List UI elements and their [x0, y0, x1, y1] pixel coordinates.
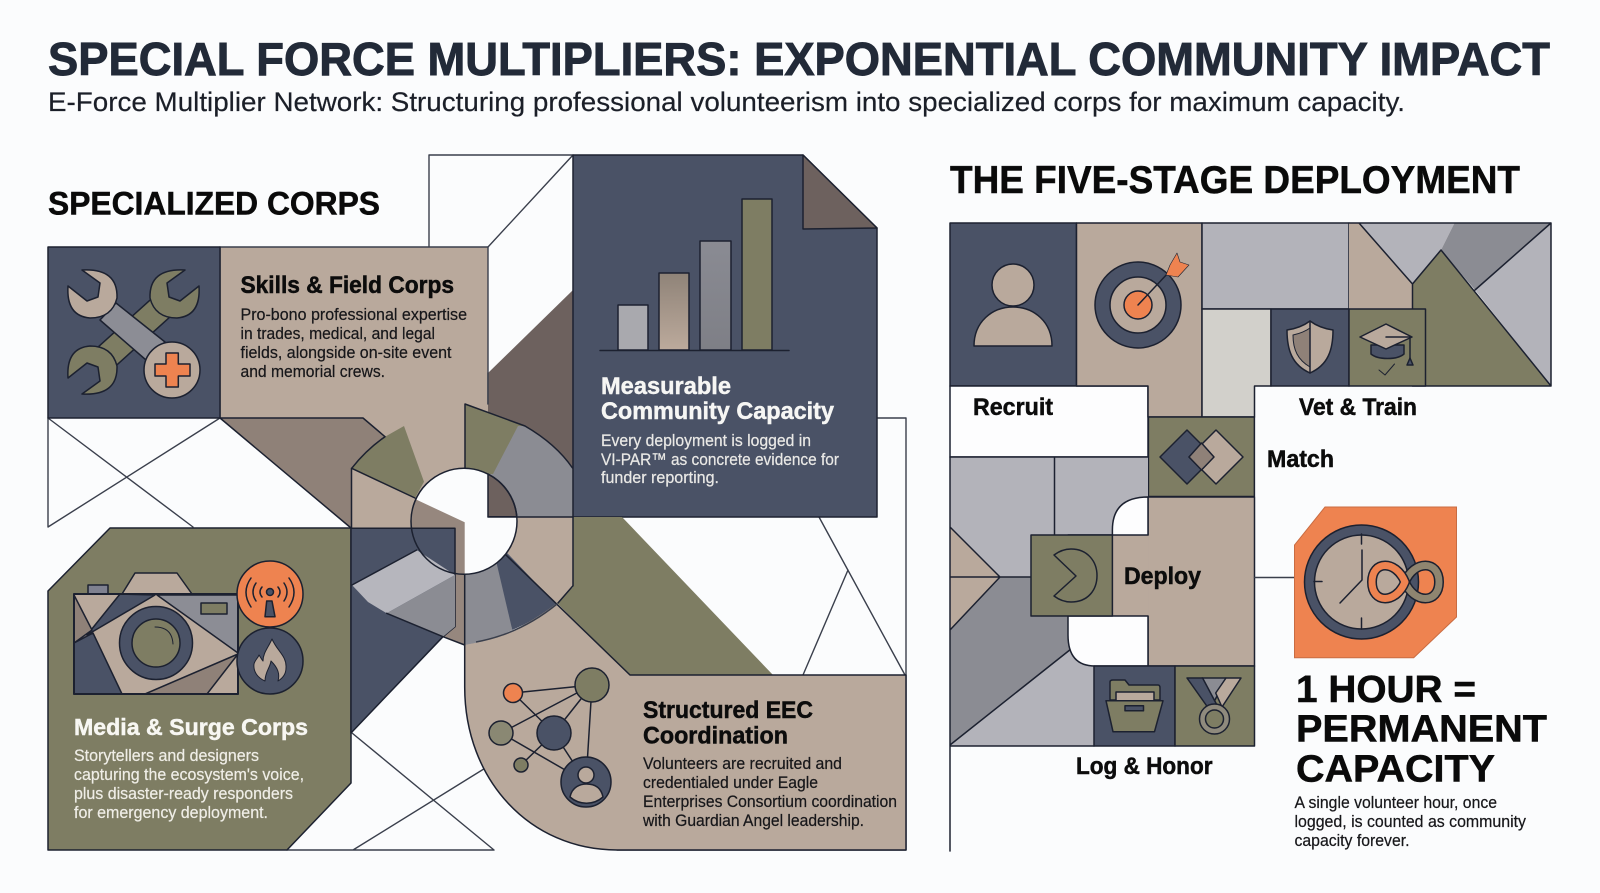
media description: [74, 746, 304, 822]
mosaic lower-left tiles: [950, 457, 1148, 851]
icon: medal: [1187, 678, 1241, 734]
navy pinwheel blade: [351, 528, 455, 733]
olive diagonal band: [557, 517, 773, 675]
mosaic tiles: [1202, 223, 1551, 417]
central white hub: [411, 468, 517, 645]
folded corner: [803, 155, 877, 229]
media heading: Media & Surge Corps: [74, 714, 308, 740]
EEC description: Enterprises Consortium coordination: [643, 792, 897, 811]
connector: deploy to clock: [1254, 576, 1295, 578]
skills description: Pro-bono professional expertise: [240, 305, 467, 324]
skills heading: Skills & Field Corps: [240, 272, 454, 299]
callout description: capacity forever.: [1294, 832, 1410, 850]
callout description: A single volunteer hour, once: [1294, 794, 1497, 812]
subtitle: E-Force Multiplier Network: Structuring professional volunteerism into specialized corps for maximum capacity.: [48, 87, 1405, 117]
panel: structured EEC coordination: [465, 555, 906, 850]
match label: Match: [1267, 446, 1334, 473]
media description: for emergency deployment.: [74, 803, 268, 822]
skills description: [240, 305, 467, 381]
media description: Storytellers and designers: [74, 746, 259, 765]
icon: target and arrow: [1095, 253, 1189, 348]
lower grey fan: [465, 540, 512, 645]
stage: log and honor: [1076, 666, 1254, 780]
measurable heading: [601, 373, 835, 425]
icon: clock with infinity: [1304, 525, 1439, 639]
vet and train label: Vet & Train: [1299, 394, 1417, 421]
skills description: in trades, medical, and legal: [240, 324, 435, 343]
panel: five-stage mosaic: [950, 223, 1551, 851]
skills description: and memorial crews.: [240, 362, 385, 381]
white pocket top: [1112, 497, 1148, 535]
media description: capturing the ecosystem's voice,: [74, 765, 304, 784]
media description: plus disaster-ready responders: [74, 784, 293, 803]
tile: graduation cap: [1349, 309, 1426, 386]
EEC description: Volunteers are recruited and: [643, 754, 842, 773]
deploy label: Deploy: [1124, 563, 1202, 590]
tile: target tile: [1076, 223, 1202, 417]
heading: specialized corps: SPECIALIZED CORPS: [48, 186, 380, 222]
icon: crossed wrenches and medical cross: [68, 270, 200, 398]
skills description: fields, alongside on-site event: [240, 343, 452, 362]
icon: flame: [237, 628, 303, 694]
panel: media and surge corps: [48, 468, 517, 850]
EEC description: [642, 754, 897, 830]
panel: skills and field corps: [48, 247, 488, 530]
recruit label box: [950, 386, 1148, 457]
central pinwheel: upper fan: [352, 290, 573, 650]
icon: pie segment: [1054, 549, 1097, 602]
measurable heading: Community Capacity: [601, 398, 835, 425]
callout description: [1294, 794, 1527, 850]
bar chart: [600, 199, 789, 350]
stage: deploy: [1031, 497, 1254, 666]
recruit label: Recruit: [973, 394, 1053, 421]
stage: recruit: [950, 223, 1148, 457]
brown shape under skills panel: [220, 418, 385, 528]
white pocket bottom: [1068, 616, 1148, 666]
callout headline: PERMANENT: [1296, 708, 1547, 750]
icon: person: [974, 264, 1052, 346]
icon: file folder: [1106, 680, 1163, 732]
measurable description: [601, 431, 839, 487]
tile: shield: [1271, 309, 1349, 386]
hub outline: [411, 468, 517, 574]
measurable heading: Measurable: [601, 373, 731, 400]
icon: emergency broadcast: [237, 561, 303, 627]
title: SPECIAL FORCE MULTIPLIERS: EXPONENTIAL COMMUNITY IMPACT: [48, 33, 1550, 85]
lower right tan wedge: [465, 517, 572, 650]
icon: overlapping diamonds: [1160, 430, 1243, 484]
measurable description: funder reporting.: [601, 468, 719, 487]
EEC heading: Coordination: [643, 722, 788, 750]
panel: measurable community capacity: [573, 155, 877, 517]
log and honor label: Log & Honor: [1076, 753, 1212, 780]
EEC description: with Guardian Angel leadership.: [642, 811, 864, 830]
icon: graduation cap: [1360, 324, 1413, 375]
callout headline: CAPACITY: [1296, 748, 1495, 790]
callout headline: [1296, 669, 1547, 790]
EEC heading: Structured EEC: [643, 697, 813, 724]
heading: five-stage deployment: THE FIVE-STAGE DEPLOYMENT: [950, 159, 1520, 202]
EEC description: credentialed under Eagle: [643, 773, 818, 792]
measurable description: VI-PAR™ as concrete evidence for: [601, 450, 839, 469]
callout description: logged, is counted as community: [1294, 813, 1527, 831]
measurable description: Every deployment is logged in: [601, 431, 811, 450]
geometric line art background: [48, 155, 906, 850]
icon: network of people: [489, 668, 611, 807]
icon: shield: [1287, 321, 1333, 373]
icon tile: wrenches: [48, 247, 220, 418]
icon: camera: [74, 573, 238, 694]
EEC heading: [643, 697, 813, 750]
callout headline: 1 HOUR =: [1296, 669, 1476, 711]
stage: match: [1148, 417, 1334, 496]
callout: one hour equals permanent capacity: [1294, 507, 1547, 850]
